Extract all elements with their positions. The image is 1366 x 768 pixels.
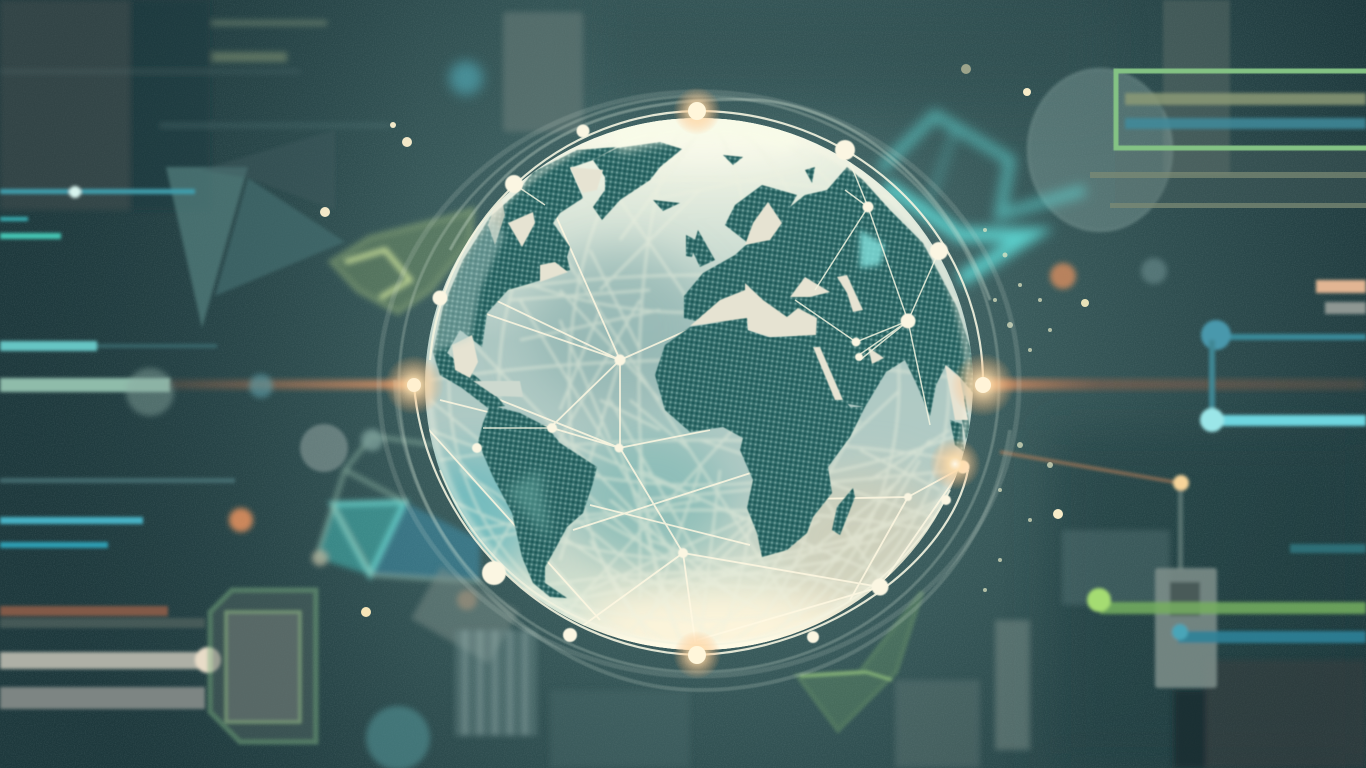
fading stripes on north america rim — [433, 217, 505, 352]
panel: top-left grey block — [0, 0, 390, 210]
panel: right top frame with ellipse — [1028, 0, 1366, 231]
rim glow — [429, 122, 969, 646]
continent: africa — [655, 318, 865, 557]
mesh — [430, 118, 970, 650]
continent: islands — [653, 155, 970, 535]
icon: translucent triangles — [166, 130, 345, 328]
icon: cyan mesh lower left — [312, 429, 480, 582]
continent: greenland — [593, 142, 682, 220]
continent: north america — [433, 147, 617, 408]
continent seas and lakes — [452, 167, 968, 420]
continent: eurasia — [684, 167, 975, 416]
lens flares — [384, 87, 1015, 679]
icon: cyan swirl upper right of globe — [880, 115, 1085, 280]
globe — [410, 105, 983, 655]
globe body — [425, 118, 973, 650]
outer orbit rings — [379, 92, 1019, 690]
network nodes — [432, 124, 970, 643]
continent: south america — [478, 405, 597, 598]
continents — [433, 142, 975, 598]
network rim rings — [414, 111, 983, 655]
left data lines — [0, 186, 235, 709]
icon: green polygon bottom centre — [798, 592, 922, 730]
panel: top centre block — [503, 12, 583, 132]
bottom bar codes and panels — [411, 530, 1366, 768]
globe shading and network — [410, 105, 975, 655]
right side connector lines — [1000, 280, 1366, 688]
icon: green mesh blob left — [332, 210, 472, 312]
network overlay lines — [483, 150, 939, 428]
decorative bokeh circles — [126, 61, 1167, 768]
horizontal flare beam — [170, 379, 1366, 390]
sparkle particles right of globe — [983, 228, 1053, 592]
icon: green frame bottom left — [210, 590, 316, 742]
